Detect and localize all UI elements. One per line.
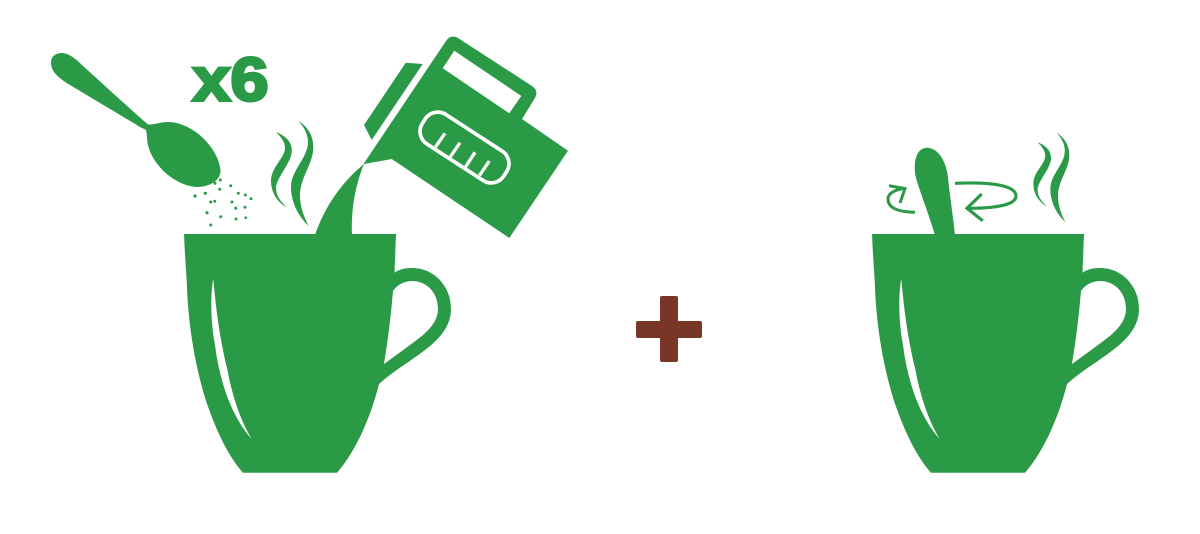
label: x6: x6: [192, 46, 268, 114]
icon: kettle body with gauge: [363, 37, 568, 238]
icon: small stirring arrow: [888, 186, 915, 212]
gauge: [414, 106, 515, 189]
icon: steam: [1033, 133, 1069, 222]
kettle side panel: [364, 63, 423, 140]
icon: falling sugar grains: [193, 178, 252, 226]
icon: cup: [184, 234, 451, 473]
icon: spoon: [51, 53, 221, 187]
step 2: stirring cup: [872, 133, 1139, 473]
step 1: sugar, kettle and cup: [51, 37, 568, 473]
icon: spoon handle: [915, 148, 955, 235]
icon: large stirring arrow: [955, 183, 1016, 221]
icon: cup: [872, 234, 1139, 473]
plus sign: [636, 296, 702, 362]
icon: steam: [271, 121, 313, 226]
icon: water stream: [315, 164, 364, 235]
